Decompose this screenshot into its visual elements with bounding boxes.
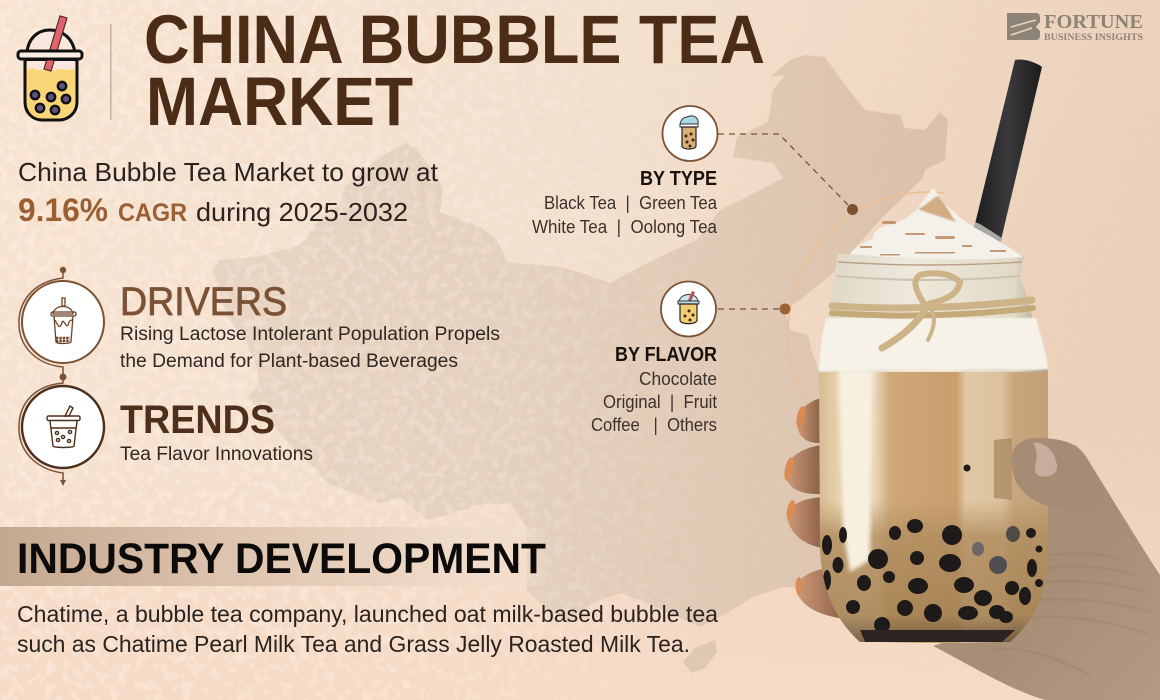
by type list: Black Tea | Green Tea [544,193,718,213]
drivers circle [22,281,104,363]
dashed connector [718,308,785,310]
by flavor list: Chocolate [639,369,717,389]
connector dot [780,304,790,314]
icon: bubble tea cup [18,16,82,120]
growth statement: CAGR [118,199,187,227]
glass highlight [838,370,873,572]
icon: by flavor cup [661,282,716,336]
title [144,1,765,140]
panel: by type [532,106,858,237]
logo: Fortune Business Insights: BUSINESS INSIGHTS [1044,33,1143,43]
drivers text: Rising Lactose Intolerant Population Propels [120,324,500,345]
heading: trends: TRENDS [120,398,275,442]
heading: by type: BY TYPE [640,168,717,190]
by flavor list: Coffee | Others [591,415,717,435]
by type list [532,193,718,237]
growth statement [18,157,439,228]
mottled texture [0,0,554,700]
drivers text: the Demand for Plant-based Beverages [120,351,458,372]
twine and bow [832,273,1033,348]
icon: by type cup [662,106,718,161]
heading: drivers: DRIVERS [120,280,287,324]
by flavor list: Original | Fruit [603,392,717,412]
industry development text [17,601,718,657]
thumb [994,438,1100,511]
jar rim lines [836,262,1022,280]
by flavor list [591,369,717,435]
growth statement: China Bubble Tea Market to grow at [18,157,439,187]
by type list: White Tea | Oolong Tea [532,217,718,237]
logo: Fortune Business Insights [1007,11,1143,43]
connector dot [847,204,858,215]
lower tea shade [819,500,1048,644]
panel: drivers and trends timeline [19,267,500,486]
industry development text: Chatime, a bubble tea company, launched oat milk-based bubble tea [17,601,718,627]
foam [819,318,1048,371]
heading: by flavor: BY FLAVOR [615,344,717,366]
orange arc [788,192,945,395]
dashed connector [718,134,852,209]
divider [110,24,112,120]
growth statement: 9.16% [18,192,108,228]
whipped cream [850,188,1023,259]
drivers text [120,324,500,372]
title: MARKET [146,63,413,140]
boba pearls [822,464,1043,644]
icon: drivers cup [51,298,76,344]
connector dots [60,267,66,486]
logo: Fortune Business Insights: FORTUNE [1044,11,1143,33]
fingers [783,398,845,619]
bubble tea jar photo [783,59,1160,700]
panel: by flavor [591,282,790,435]
jar neck [819,254,1048,372]
heading band: industry development: INDUSTRY DEVELOPMENT [17,535,546,583]
jar straw [975,59,1042,240]
map of China [213,55,948,673]
hand [933,445,1160,700]
icon: trends cup [47,406,80,448]
milk tea body [819,372,1048,643]
industry development text: such as Chatime Pearl Milk Tea and Grass Jelly Roasted Milk Tea. [17,631,690,657]
trends text: Tea Flavor Innovations [120,444,313,465]
connector lines [19,270,63,482]
growth statement: during 2025-2032 [196,197,408,227]
trends circle [22,386,104,468]
title: CHINA BUBBLE TEA [144,1,765,78]
